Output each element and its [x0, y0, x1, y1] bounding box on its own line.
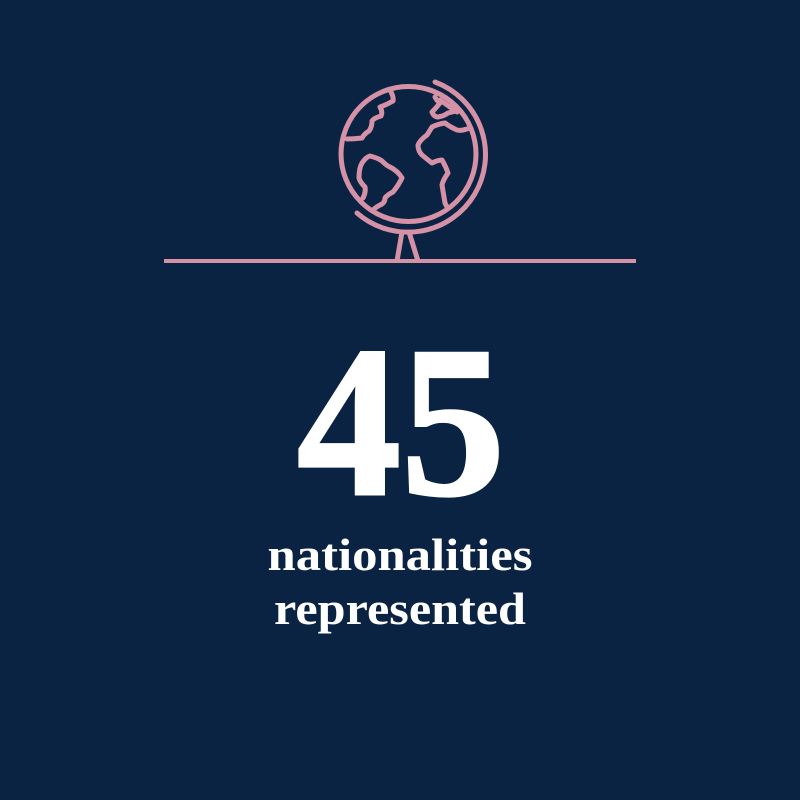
globe meridian arc [357, 82, 485, 232]
icon: globe on stand [341, 82, 485, 261]
caption line 2: represented [274, 584, 526, 634]
caption [268, 530, 532, 634]
continent: africa and eurasia [418, 123, 467, 207]
continent: greenland [432, 97, 457, 117]
continent: south america [359, 156, 402, 210]
caption line 1: nationalities [268, 530, 532, 580]
baseline rule [164, 259, 636, 263]
globe sphere [341, 86, 476, 222]
big number: 45 [297, 302, 505, 541]
continent: north america [347, 90, 393, 139]
globe stand legs [397, 232, 418, 261]
